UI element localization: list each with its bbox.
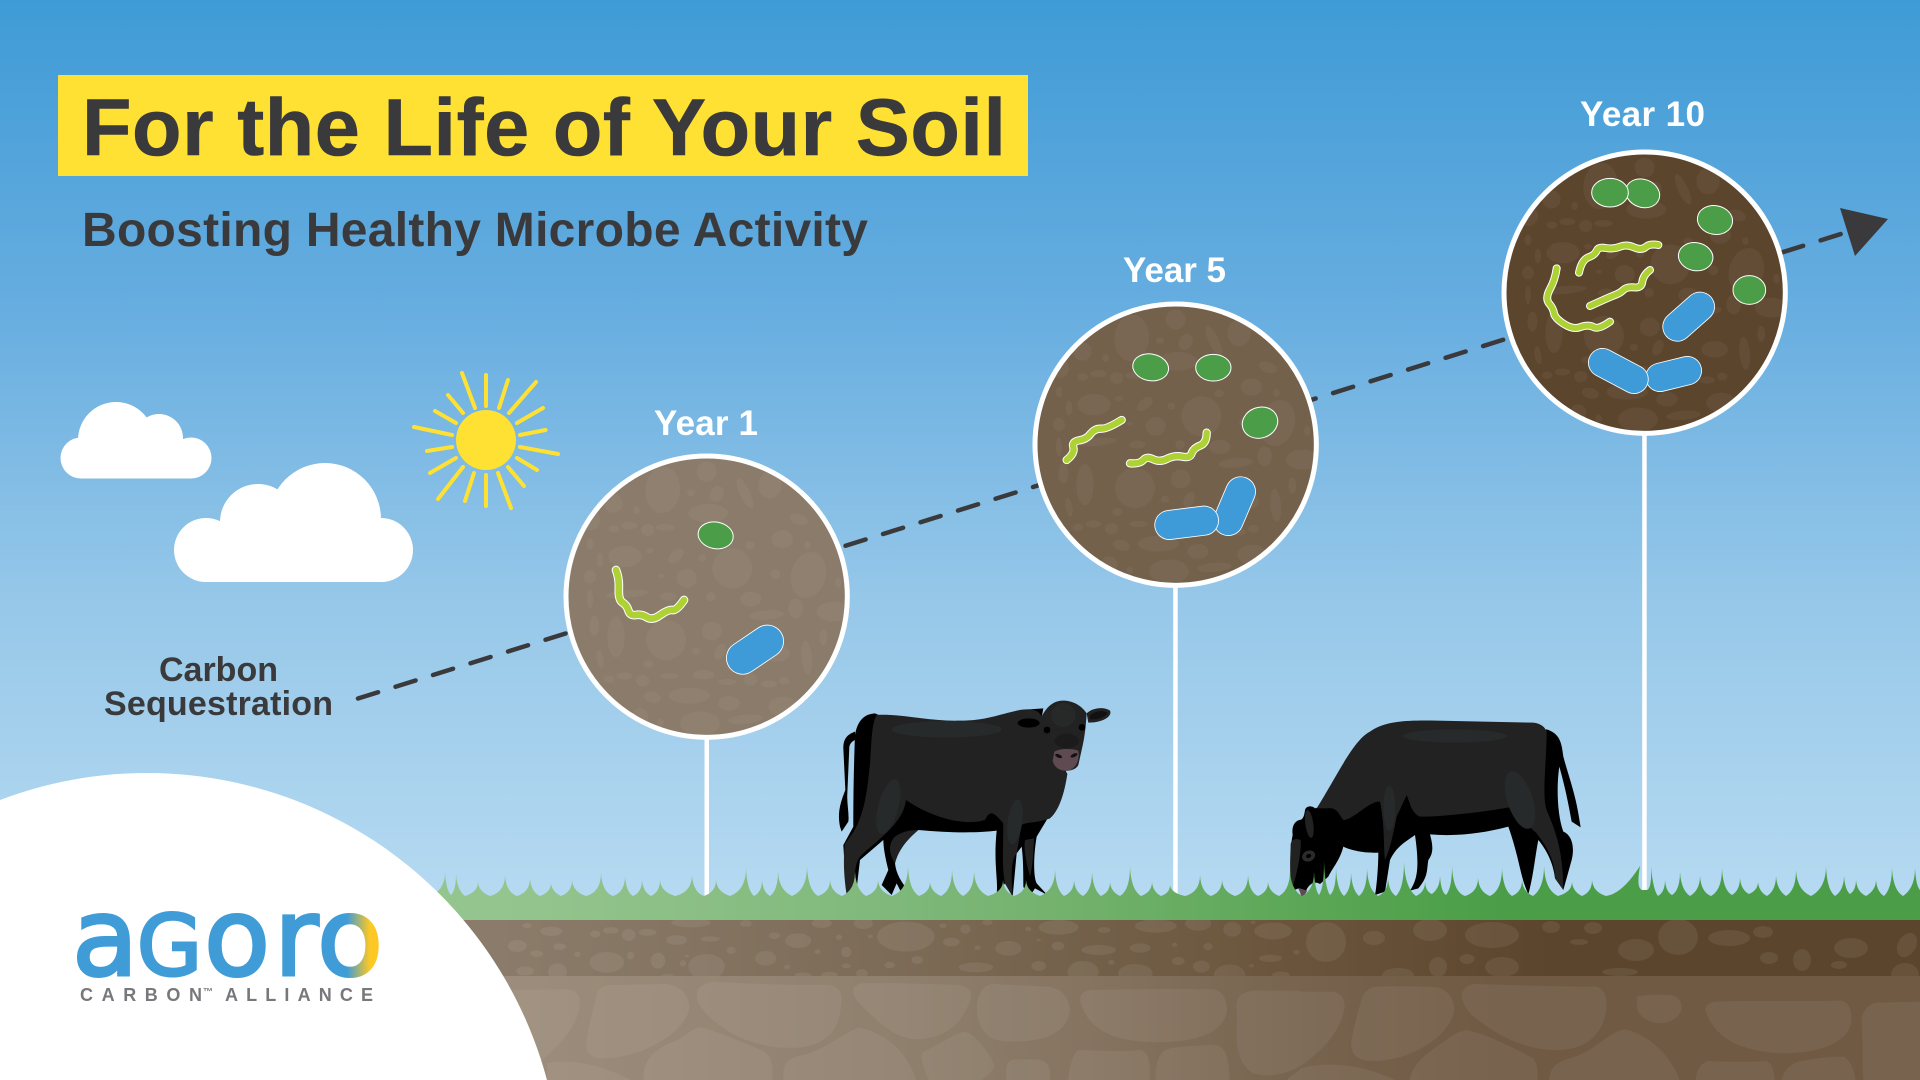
logo: tagline: ALLIANCE xyxy=(225,985,373,1005)
logo: tagline: ™ xyxy=(203,987,213,998)
label: carbon sequestration xyxy=(104,651,333,723)
dashed trend line: carbon sequestration xyxy=(358,228,1860,698)
label: carbon sequestration: Sequestration xyxy=(104,685,333,723)
cow: standing xyxy=(839,701,1110,898)
icon: large cloud xyxy=(174,463,413,582)
panel: year 10 soil circle xyxy=(1504,152,1788,433)
logo: agoro wordmark: o xyxy=(317,876,383,1001)
stem: year 1 xyxy=(704,735,709,905)
stem: year 5 xyxy=(1173,585,1178,905)
heading: year 10: Year 10 xyxy=(1580,95,1705,134)
title banner: For the Life of Your Soil xyxy=(82,83,1006,173)
white corner panel xyxy=(0,773,547,1080)
stem: year 10 xyxy=(1642,432,1647,902)
arrow head xyxy=(1840,208,1888,256)
heading: year 1: Year 1 xyxy=(654,404,758,443)
logo: tagline xyxy=(80,985,373,1005)
logo: agoro wordmark: o xyxy=(204,876,270,1001)
logo: agoro wordmark: G xyxy=(137,897,202,995)
logo: tagline: CARBON xyxy=(80,985,202,1005)
heading: year 5: Year 5 xyxy=(1123,251,1226,290)
logo: agoro wordmark: a xyxy=(72,876,138,1001)
panel: year 1 soil circle xyxy=(566,456,850,737)
panel: year 5 soil circle xyxy=(1035,304,1319,585)
grass strip xyxy=(430,861,1920,925)
cow: grazing xyxy=(1290,721,1581,899)
logo: agoro wordmark: r xyxy=(274,876,319,1001)
subsoil band xyxy=(430,976,1920,1080)
label: carbon sequestration: Carbon xyxy=(159,651,278,689)
icon: small cloud xyxy=(60,402,212,478)
subtitle: Boosting Healthy Microbe Activity xyxy=(82,204,868,257)
logo: agoro wordmark xyxy=(72,876,383,1001)
topsoil band xyxy=(464,920,1920,976)
icon: sun xyxy=(414,373,558,508)
